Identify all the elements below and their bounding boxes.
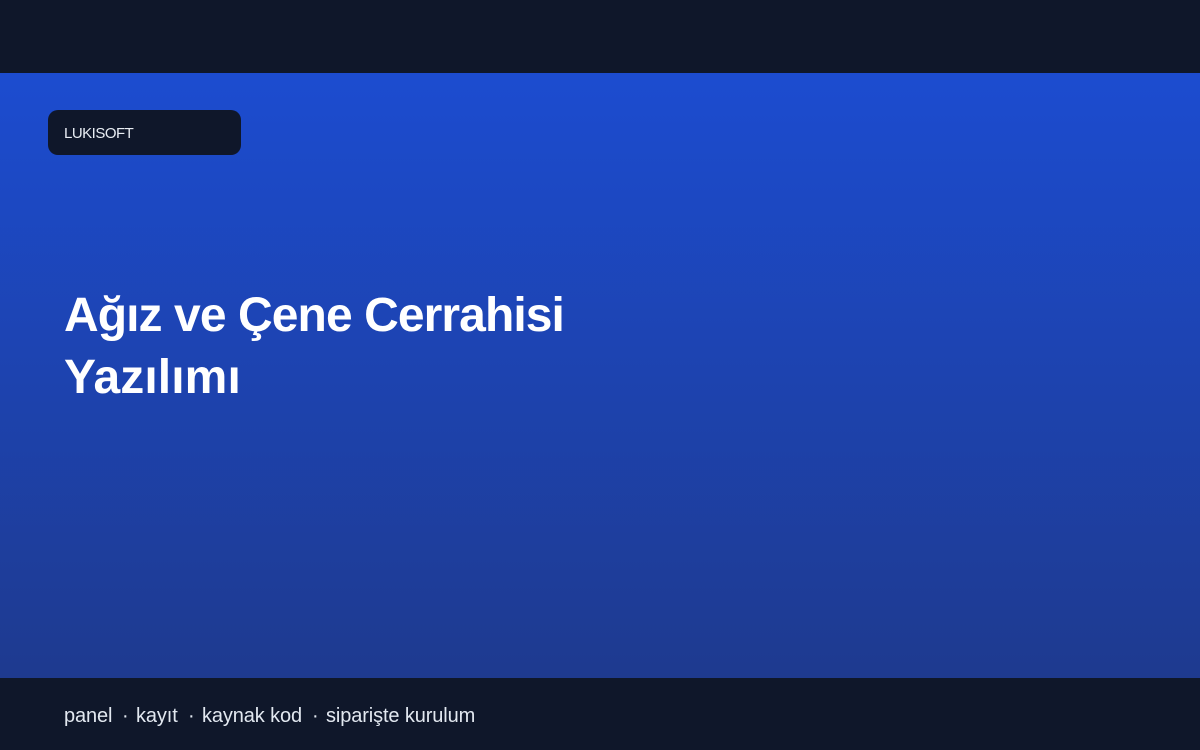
title (64, 289, 564, 404)
title: Yazılımı (64, 351, 241, 404)
brand name: LUKISOFT (64, 125, 133, 142)
footer feature list: · (188, 705, 195, 727)
title: Ağız ve Çene Cerrahisi (64, 289, 564, 342)
footer feature list: · (122, 705, 129, 727)
footer feature list: kaynak kod (202, 705, 302, 727)
footer bar (0, 678, 1200, 750)
top bar (0, 0, 1200, 73)
footer feature list: siparişte kurulum (326, 705, 475, 727)
footer feature list: kayıt (136, 705, 178, 727)
brand badge (48, 110, 241, 155)
footer feature list: · (312, 705, 319, 727)
footer feature list: panel (64, 705, 112, 727)
footer feature list (64, 705, 475, 727)
